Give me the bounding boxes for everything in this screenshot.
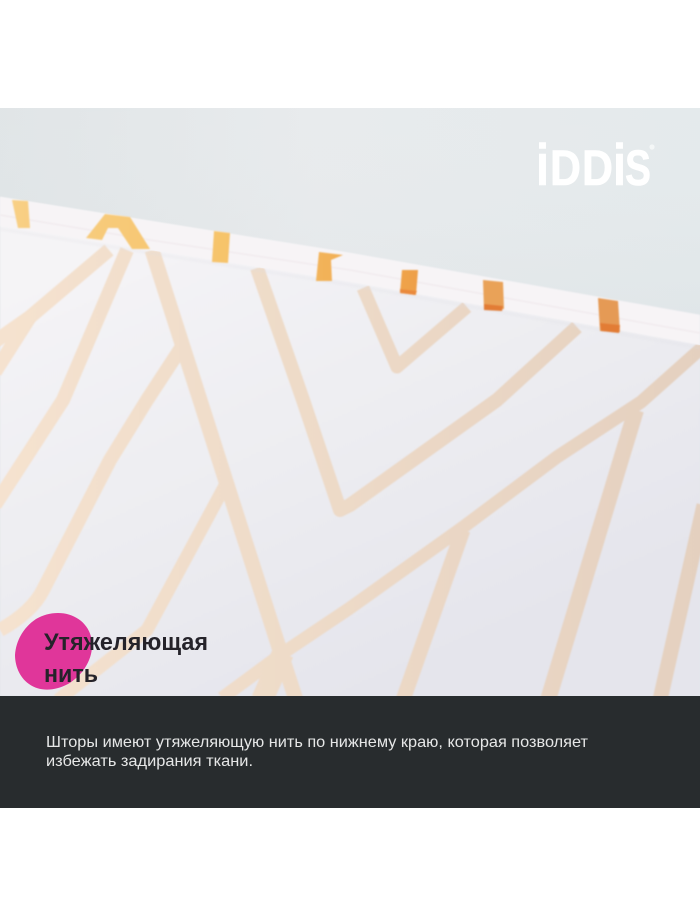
logo: iDDiS: S [625, 140, 651, 196]
caption text: Шторы имеют утяжеляющую нить по нижнему краю, которая позволяет [46, 734, 589, 751]
heading: weighted thread: нить [44, 661, 98, 688]
caption text [46, 734, 589, 770]
photo: curtain fabric [0, 197, 700, 700]
logo: iDDiS [539, 142, 654, 186]
logo: iDDiS: D [550, 140, 581, 196]
product infographic illustration [0, 108, 700, 808]
orange weighted thread tabs [12, 200, 620, 333]
fabric geometric line pattern [0, 250, 700, 700]
heading: weighted thread [44, 634, 206, 682]
pink accent blob [15, 613, 92, 690]
logo: iDDiS: D [582, 140, 613, 196]
logo: iDDiS: i [536, 133, 549, 198]
hem band [152, 250, 700, 346]
logo: iDDiS: i [613, 133, 626, 198]
caption text: избежать задирания ткани. [46, 753, 253, 770]
photo: wall background [0, 108, 700, 700]
dark caption band [0, 696, 700, 808]
heading: weighted thread: Утяжеляющая [44, 629, 208, 656]
